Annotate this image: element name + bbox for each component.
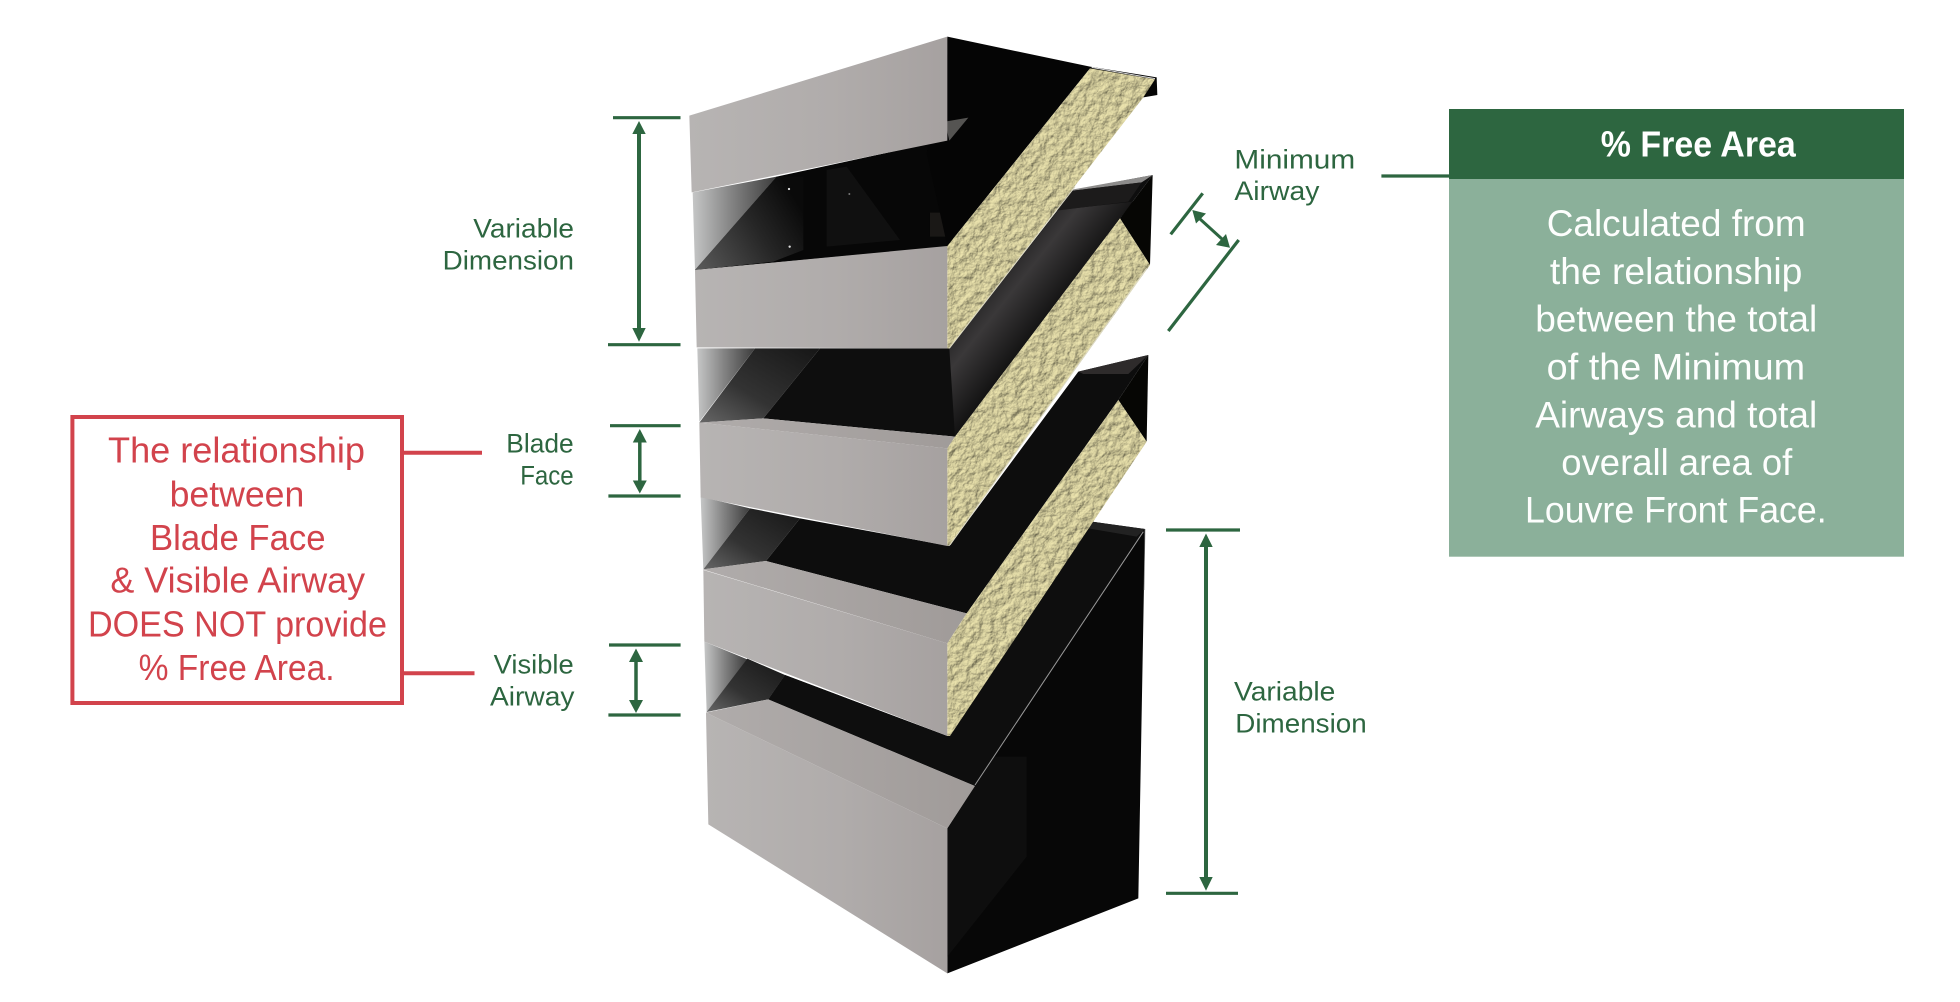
panel: % free area [1449, 109, 1904, 557]
callout: red note: % Free Area. [139, 647, 335, 688]
dimension: minimum airway [1168, 193, 1239, 331]
label: upper variable dimension: Dimension [443, 245, 574, 275]
panel body: overall area of [1561, 442, 1793, 483]
label: minimum airway [1234, 144, 1355, 206]
panel body: the relationship [1550, 251, 1802, 292]
panel body: Airways and total [1535, 394, 1817, 435]
panel body: Louvre Front Face. [1525, 489, 1827, 530]
panel body: of the Minimum [1547, 346, 1805, 387]
dimension: upper variable dimension [608, 118, 680, 345]
label: upper variable dimension: Variable [473, 213, 574, 243]
leader line: callout to visible airway [403, 671, 474, 675]
dimension: visible airway [608, 645, 681, 715]
label: upper variable dimension [443, 213, 574, 275]
panel body [1449, 179, 1904, 557]
label: visible airway: Airway [490, 681, 575, 711]
label: lower variable dimension [1234, 677, 1367, 739]
label: visible airway [490, 649, 575, 711]
callout: red note: DOES NOT provide [88, 604, 387, 645]
label: lower variable dimension: Variable [1234, 677, 1335, 707]
label: lower variable dimension: Dimension [1235, 709, 1367, 739]
blade 1 top face [689, 37, 947, 192]
blade 4 with insulation [701, 355, 1148, 736]
panel body: between the total [1535, 299, 1817, 340]
leader line: minimum airway to free area panel [1381, 174, 1451, 178]
leader line: callout to blade face [403, 451, 482, 455]
callout: red note: between [170, 474, 304, 515]
label: minimum airway: Airway [1234, 176, 1320, 206]
panel header: % Free Area [1601, 124, 1797, 165]
label: minimum airway: Minimum [1234, 144, 1355, 174]
louvre 3D illustration [689, 37, 1157, 973]
blade 3 with insulation [697, 175, 1153, 546]
label: blade face [506, 428, 574, 491]
callout: red note: & Visible Airway [110, 560, 365, 601]
panel body: Calculated from [1547, 203, 1806, 244]
blade 2 with insulation [693, 37, 1157, 348]
panel header [1449, 109, 1904, 179]
dimension: blade face [608, 426, 681, 496]
bottom louvre section [704, 522, 1145, 973]
callout: red note: Blade Face [150, 517, 326, 558]
dimension: lower variable dimension [1166, 530, 1240, 893]
label: blade face: Blade [506, 428, 574, 458]
callout: red note: The relationship [108, 430, 365, 471]
label: blade face: Face [520, 461, 574, 491]
label: visible airway: Visible [494, 649, 574, 679]
callout: red note [72, 417, 402, 703]
